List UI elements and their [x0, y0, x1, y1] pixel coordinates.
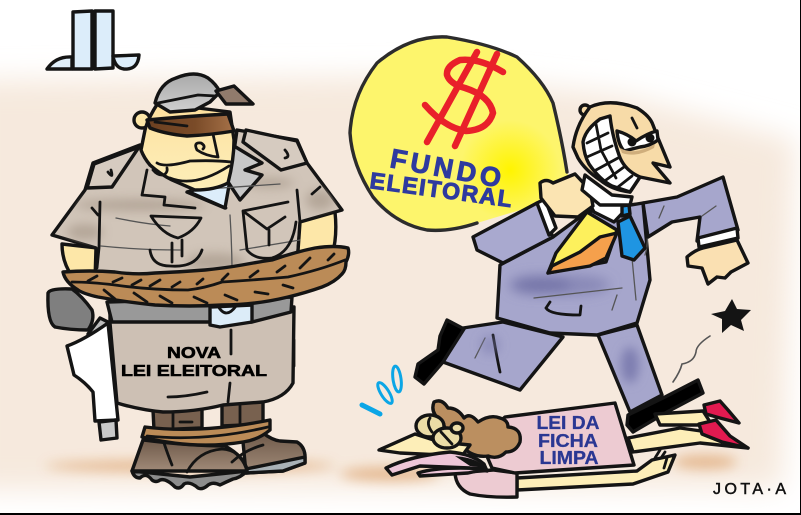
- high heels: [699, 401, 748, 448]
- eyes: [617, 131, 658, 151]
- text: lei da ficha limpa: LIMPA: [540, 448, 598, 468]
- belt: [107, 297, 292, 322]
- text: nova lei eleitoral: [121, 345, 267, 380]
- collar left: [142, 170, 226, 208]
- trouser folds: [168, 330, 294, 402]
- holster: [67, 318, 118, 440]
- text: lei da ficha limpa: LEI DA: [536, 413, 600, 433]
- suit shade on legs: [480, 335, 639, 383]
- arm holding bag: [473, 199, 556, 263]
- figure: running politician with money bag: [350, 37, 748, 432]
- ear: [580, 105, 590, 115]
- sleeve: [455, 470, 517, 497]
- teeth: [583, 116, 640, 192]
- ankle rope: [142, 420, 270, 445]
- seams and pockets: [92, 187, 320, 268]
- hair curlers: [416, 415, 463, 448]
- lower arm: [517, 455, 675, 490]
- trousers: [110, 307, 294, 412]
- bag neck orange fold: [548, 233, 617, 273]
- nose: [196, 134, 218, 157]
- legs: [153, 398, 263, 430]
- rear boot: [243, 433, 305, 473]
- rear shoe: [415, 320, 464, 384]
- figure: woman trampled on the ground: [379, 401, 748, 497]
- motion squiggle: [673, 336, 710, 382]
- fist: [687, 240, 748, 284]
- text: fundo eleitoral: [368, 143, 514, 212]
- text: fundo eleitoral: FUNDO: [388, 143, 503, 193]
- collar right: [228, 146, 262, 200]
- outstretched arm: [643, 177, 738, 241]
- text: fundo eleitoral: ELEITORAL: [368, 167, 514, 212]
- text: nova lei eleitoral: LEI ELEITORAL: [121, 363, 267, 380]
- arms: [62, 212, 336, 276]
- icon: blue sweat drops: [362, 366, 403, 414]
- front boot: [132, 440, 247, 471]
- hand gripping bag: [540, 174, 593, 217]
- signature: JOTA·A: [713, 481, 786, 498]
- rear leg: [443, 322, 563, 390]
- white collar: [585, 195, 630, 222]
- text: nova lei eleitoral: NOVA: [167, 345, 222, 362]
- rope around waist: [63, 246, 349, 306]
- mouth: [153, 161, 231, 181]
- icon: congress building: [47, 11, 139, 69]
- front leg: [598, 325, 662, 412]
- money bag: [350, 37, 572, 230]
- gun grip: [48, 289, 93, 330]
- ground shadow: [45, 455, 737, 481]
- hair: [433, 401, 520, 457]
- front shoe: [627, 380, 703, 432]
- torso: [497, 203, 650, 335]
- text: lei da ficha limpa: [536, 413, 600, 468]
- raised legs: [655, 411, 712, 425]
- bag neck: [548, 212, 617, 273]
- inner shirt: [187, 180, 230, 208]
- icon: pain star: [711, 299, 751, 333]
- ear: [134, 112, 150, 128]
- necktie: [618, 205, 645, 260]
- collar band under chin: [582, 175, 632, 205]
- epaulettes: [87, 147, 139, 188]
- icon: dollar sign: [425, 52, 503, 146]
- upturned hands and face: [379, 434, 470, 456]
- cuff: [698, 228, 738, 247]
- figure: blindfolded policeman: [48, 74, 349, 489]
- belt buckle: [210, 305, 252, 327]
- shirt: [52, 130, 342, 280]
- skull and nose: [573, 103, 670, 192]
- head: [573, 103, 670, 205]
- text: lei da ficha limpa: FICHA: [538, 431, 598, 451]
- head: [141, 103, 234, 190]
- dress: [480, 403, 634, 473]
- cap: [155, 74, 253, 112]
- blindfold: [147, 114, 234, 136]
